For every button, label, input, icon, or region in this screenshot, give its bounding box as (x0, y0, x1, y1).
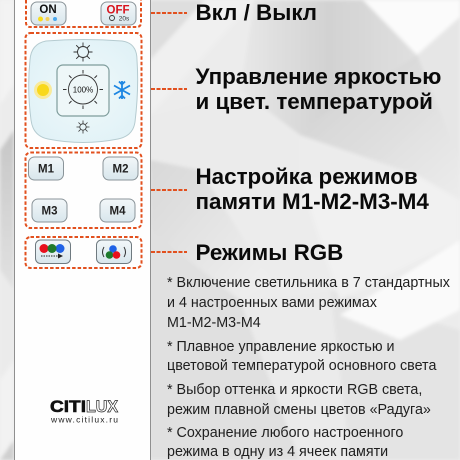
text block: feature 3: режим плавной смены цветов «Радуга» (167, 402, 431, 418)
text block: feature 2: цветовой температурой основного света (167, 358, 436, 374)
heading: memory modes (196, 164, 429, 214)
text block: feature 1: и 4 настроенных вами режимах (167, 295, 377, 311)
logo: Citilux: www.citilux.ru (50, 414, 118, 424)
button: ON: ON (39, 4, 57, 16)
icon: brightness up (74, 42, 92, 62)
button: M2 (103, 157, 138, 180)
button: M2: M2 (113, 164, 128, 176)
text block: feature 1: * Включение светильника в 7 стандартных (167, 275, 450, 291)
button: OFF: OFF (106, 4, 130, 16)
button: M1 (28, 157, 64, 180)
frame: on/off buttons (26, 0, 141, 27)
logo: Citilux: CITI (50, 398, 86, 416)
brightness and temperature pad (29, 40, 138, 142)
heading: brightness (196, 64, 441, 114)
heading: RGB modes: Режимы RGB (196, 240, 343, 265)
button: M1: M1 (38, 164, 55, 176)
button: M4 (100, 199, 135, 222)
frame: memory modes (26, 152, 142, 228)
icon: warm sun (34, 81, 52, 99)
button: M4: M4 (110, 206, 126, 218)
heading: memory modes: памяти М1-М2-М3-М4 (196, 189, 429, 214)
arrow: memory connector (151, 189, 187, 191)
text block: feature 2 (167, 339, 436, 374)
frame: brightness and temperature (26, 33, 142, 148)
heading: brightness: и цвет. температурой (196, 89, 433, 114)
logo: Citilux (50, 398, 118, 424)
heading: on/off: Вкл / Выкл (196, 0, 317, 25)
button: RGB cycle (36, 240, 70, 264)
button: OFF (101, 2, 136, 25)
text block: feature 4: * Сохранение любого настроенного (167, 425, 403, 441)
arrow: on/off connector (151, 12, 187, 14)
logo: Citilux: LUX (86, 398, 118, 416)
text block: feature 3: * Выбор оттенка и яркости RGB света, (167, 382, 422, 398)
center 100% button: 100% (73, 86, 93, 94)
text block: feature 4: режима в одну из 4 ячеек памяти (167, 444, 388, 460)
heading: brightness: Управление яркостью (196, 64, 441, 89)
text block: feature 2: * Плавное управление яркостью и (167, 339, 395, 355)
button: M3: M3 (42, 206, 57, 218)
remote control body (14, 0, 151, 460)
icon: brightness down (76, 120, 90, 134)
button: ON (31, 2, 66, 25)
arrow: brightness connector (151, 88, 187, 90)
frame: RGB modes (26, 237, 142, 268)
button: OFF: 20s (119, 16, 130, 22)
heading: memory modes: Настройка режимов (196, 164, 418, 189)
text block: feature 1: М1-М2-М3-М4 (167, 315, 261, 331)
icon: snowflake (114, 81, 130, 99)
button: RGB rainbow (96, 240, 132, 264)
button: M3 (32, 199, 67, 222)
arrow: RGB connector (151, 251, 187, 253)
text block: feature 1 (167, 275, 450, 331)
text block: feature 4 (167, 425, 403, 460)
text block: feature 3 (167, 382, 431, 418)
